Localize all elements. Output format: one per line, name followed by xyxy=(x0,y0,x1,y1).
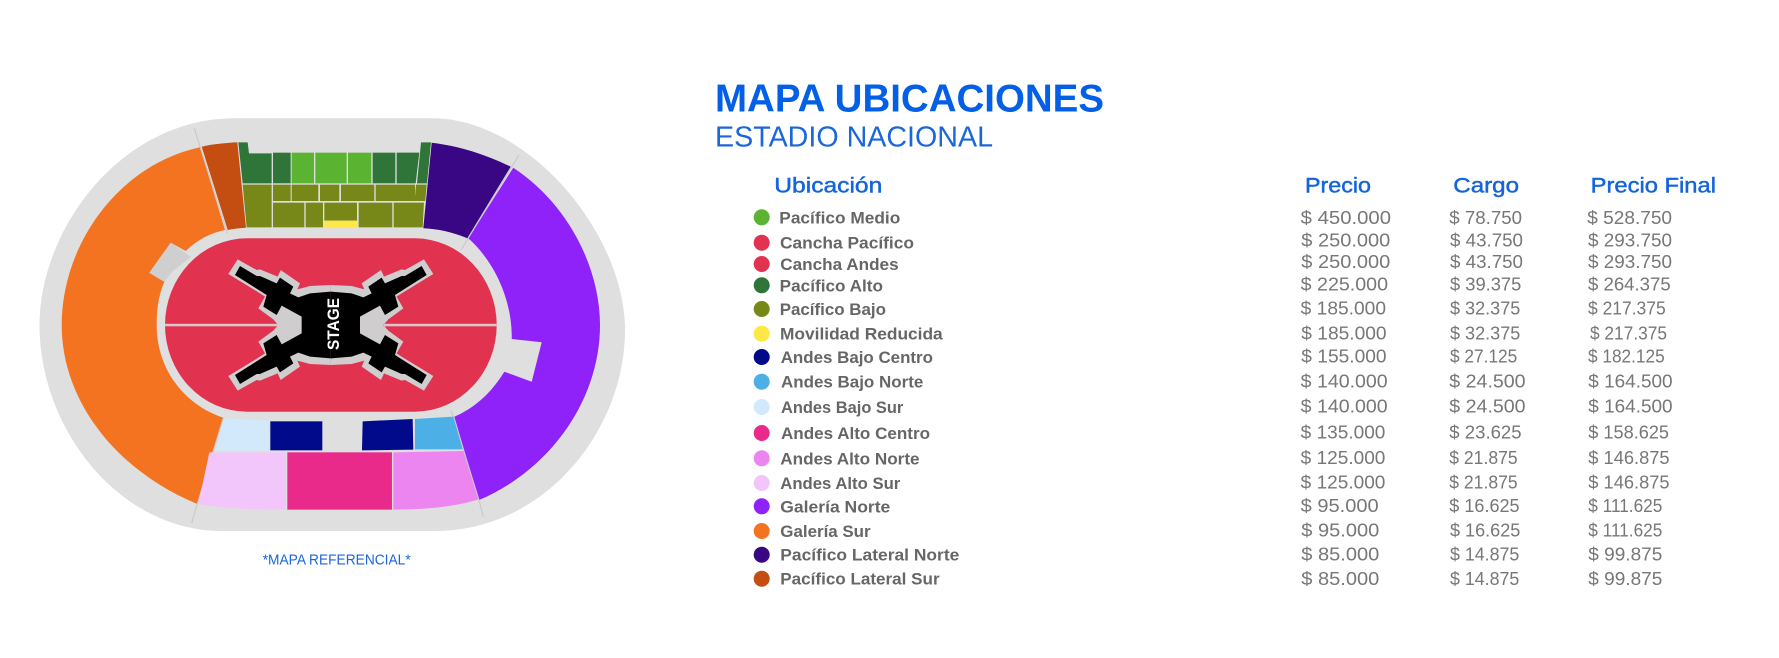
row: Movilidad Reducida: Movilidad Reducida xyxy=(780,325,943,344)
column: Precio Final values: $ 146.875 xyxy=(1588,448,1670,468)
column: Precio values: $ 140.000 xyxy=(1301,397,1388,417)
column: Precio values: $ 135.000 xyxy=(1301,423,1385,443)
column: Precio values: $ 185.000 xyxy=(1301,298,1386,318)
column: Precio Final values: $ 217.375 xyxy=(1590,323,1667,343)
column: Precio values: $ 125.000 xyxy=(1301,448,1385,468)
Movilidad Reducida block xyxy=(324,221,357,227)
column: Cargo values: $ 21.875 xyxy=(1449,473,1518,493)
column: Precio values: $ 185.000 xyxy=(1301,323,1387,343)
header: Ubicación: Ubicación xyxy=(774,175,882,198)
Andes Bajo Centro left xyxy=(270,421,322,450)
column: Cargo values: $ 32.375 xyxy=(1450,298,1520,318)
section: Galería Norte xyxy=(454,168,600,500)
column: Precio Final values: $ 528.750 xyxy=(1587,208,1672,228)
row: Cancha Andes: Cancha Andes xyxy=(780,255,899,274)
cancha divider lines xyxy=(165,324,497,326)
subtitle: ESTADIO NACIONAL xyxy=(715,122,993,154)
row: Andes Alto Norte: Andes Alto Norte xyxy=(780,449,920,468)
Andes Bajo Centro right xyxy=(362,419,413,450)
column: Precio Final values: $ 293.750 xyxy=(1588,252,1672,272)
stage black platform xyxy=(235,266,427,384)
column: Cargo values: $ 24.500 xyxy=(1449,397,1526,417)
column: Cargo values: $ 23.625 xyxy=(1449,423,1522,443)
stage xyxy=(228,259,433,391)
column: Cargo values: $ 43.750 xyxy=(1450,231,1523,251)
row: Andes Bajo Sur: Andes Bajo Sur xyxy=(781,398,904,417)
column: Precio values: $ 85.000 xyxy=(1301,545,1379,565)
row: Pacífico Bajo: Pacífico Bajo xyxy=(780,300,886,319)
title: MAPA UBICACIONES xyxy=(715,78,1104,121)
Andes Alto Sur xyxy=(198,452,286,510)
left gate xyxy=(149,243,191,282)
Pacífico Bajo blocks xyxy=(243,185,427,227)
column: Precio values: $ 450.000 xyxy=(1301,208,1391,228)
column: Precio Final values: $ 182.125 xyxy=(1588,347,1665,367)
Andes Bajo Sur xyxy=(216,418,269,451)
row: Pacífico Lateral Norte: Pacífico Lateral Norte xyxy=(780,546,959,565)
header: Cargo: Cargo xyxy=(1453,175,1519,198)
header: Precio Final: Precio Final xyxy=(1591,175,1716,198)
Pacífico Alto blocks xyxy=(238,142,431,183)
column: Cargo values: $ 21.875 xyxy=(1449,448,1518,468)
row: Pacífico Alto: Pacífico Alto xyxy=(780,276,883,295)
section: Galería Sur xyxy=(62,147,225,504)
column: Precio values: $ 250.000 xyxy=(1301,231,1390,251)
column: Precio Final values: $ 158.625 xyxy=(1588,423,1669,443)
column: Precio Final values: $ 111.625 xyxy=(1588,521,1662,541)
Andes Bajo Norte xyxy=(415,417,463,449)
column: Precio values: $ 125.000 xyxy=(1301,473,1385,493)
column: Cargo values: $ 14.875 xyxy=(1450,569,1519,589)
row: Galería Sur: Galería Sur xyxy=(780,522,871,541)
legend: locations xyxy=(754,208,959,589)
column: Cargo values: $ 16.625 xyxy=(1449,496,1520,516)
header: Precio: Precio xyxy=(1305,175,1371,198)
row: Pacífico Lateral Sur: Pacífico Lateral Sur xyxy=(780,570,940,589)
Pacífico sections xyxy=(238,142,431,227)
column: Precio Final values: $ 111.625 xyxy=(1588,496,1662,516)
column: Cargo values: $ 16.625 xyxy=(1450,521,1520,541)
column: Cargo values xyxy=(1449,208,1526,589)
row: Cancha Pacífico: Cancha Pacífico xyxy=(780,234,914,253)
column: Precio values: $ 250.000 xyxy=(1301,252,1390,272)
Andes Alto Norte xyxy=(393,451,478,510)
column: Precio values: $ 155.000 xyxy=(1301,347,1387,367)
column: Cargo values: $ 39.375 xyxy=(1450,275,1521,295)
column: Precio Final values: $ 293.750 xyxy=(1588,231,1672,251)
row: Andes Alto Centro: Andes Alto Centro xyxy=(781,424,930,443)
column: Cargo values: $ 78.750 xyxy=(1449,208,1522,228)
Pacífico Medio blocks xyxy=(292,153,371,183)
column: Precio values: $ 95.000 xyxy=(1301,521,1379,541)
stadium outer shell xyxy=(40,118,625,531)
stadium map xyxy=(40,118,625,531)
column: Precio values: $ 95.000 xyxy=(1301,496,1379,516)
column: Precio Final values: $ 146.875 xyxy=(1588,473,1670,493)
column: Cargo values: $ 24.500 xyxy=(1449,371,1526,391)
row: Galería Norte: Galería Norte xyxy=(780,497,890,516)
column: Cargo values: $ 43.750 xyxy=(1450,252,1523,272)
row: Andes Bajo Centro: Andes Bajo Centro xyxy=(781,348,933,367)
column: Precio values: $ 225.000 xyxy=(1301,275,1388,295)
map footnote: *MAPA REFERENCIAL* xyxy=(263,552,411,568)
Andes Alto Centro xyxy=(287,452,392,510)
Andes sections xyxy=(198,417,478,510)
section: Cancha xyxy=(165,238,497,412)
column: Cargo values: $ 27.125 xyxy=(1450,347,1517,367)
stage label: STAGE xyxy=(324,298,343,350)
row: Andes Alto Sur: Andes Alto Sur xyxy=(780,474,901,493)
column: Precio Final values: $ 99.875 xyxy=(1588,569,1662,589)
section: Pacífico Lateral Sur xyxy=(202,142,246,230)
stage outline xyxy=(228,259,433,391)
section: Pacífico Lateral Norte xyxy=(423,143,511,238)
column: Precio Final values: $ 164.500 xyxy=(1588,371,1673,391)
table headers xyxy=(774,175,1716,198)
column: Cargo values: $ 32.375 xyxy=(1450,323,1520,343)
column: Precio Final values: $ 164.500 xyxy=(1588,397,1673,417)
column: Precio values xyxy=(1301,208,1391,589)
column: Precio Final values xyxy=(1587,208,1673,589)
column: Precio Final values: $ 217.375 xyxy=(1588,298,1666,318)
column: Precio values: $ 85.000 xyxy=(1301,569,1379,589)
column: Cargo values: $ 14.875 xyxy=(1450,545,1519,565)
column: Precio Final values: $ 264.375 xyxy=(1588,275,1671,295)
column: Precio values: $ 140.000 xyxy=(1301,371,1388,391)
column: Precio Final values: $ 99.875 xyxy=(1588,545,1662,565)
row: Pacífico Medio: Pacífico Medio xyxy=(779,208,900,227)
section divider lines xyxy=(192,128,519,523)
row: Andes Bajo Norte: Andes Bajo Norte xyxy=(781,373,923,392)
